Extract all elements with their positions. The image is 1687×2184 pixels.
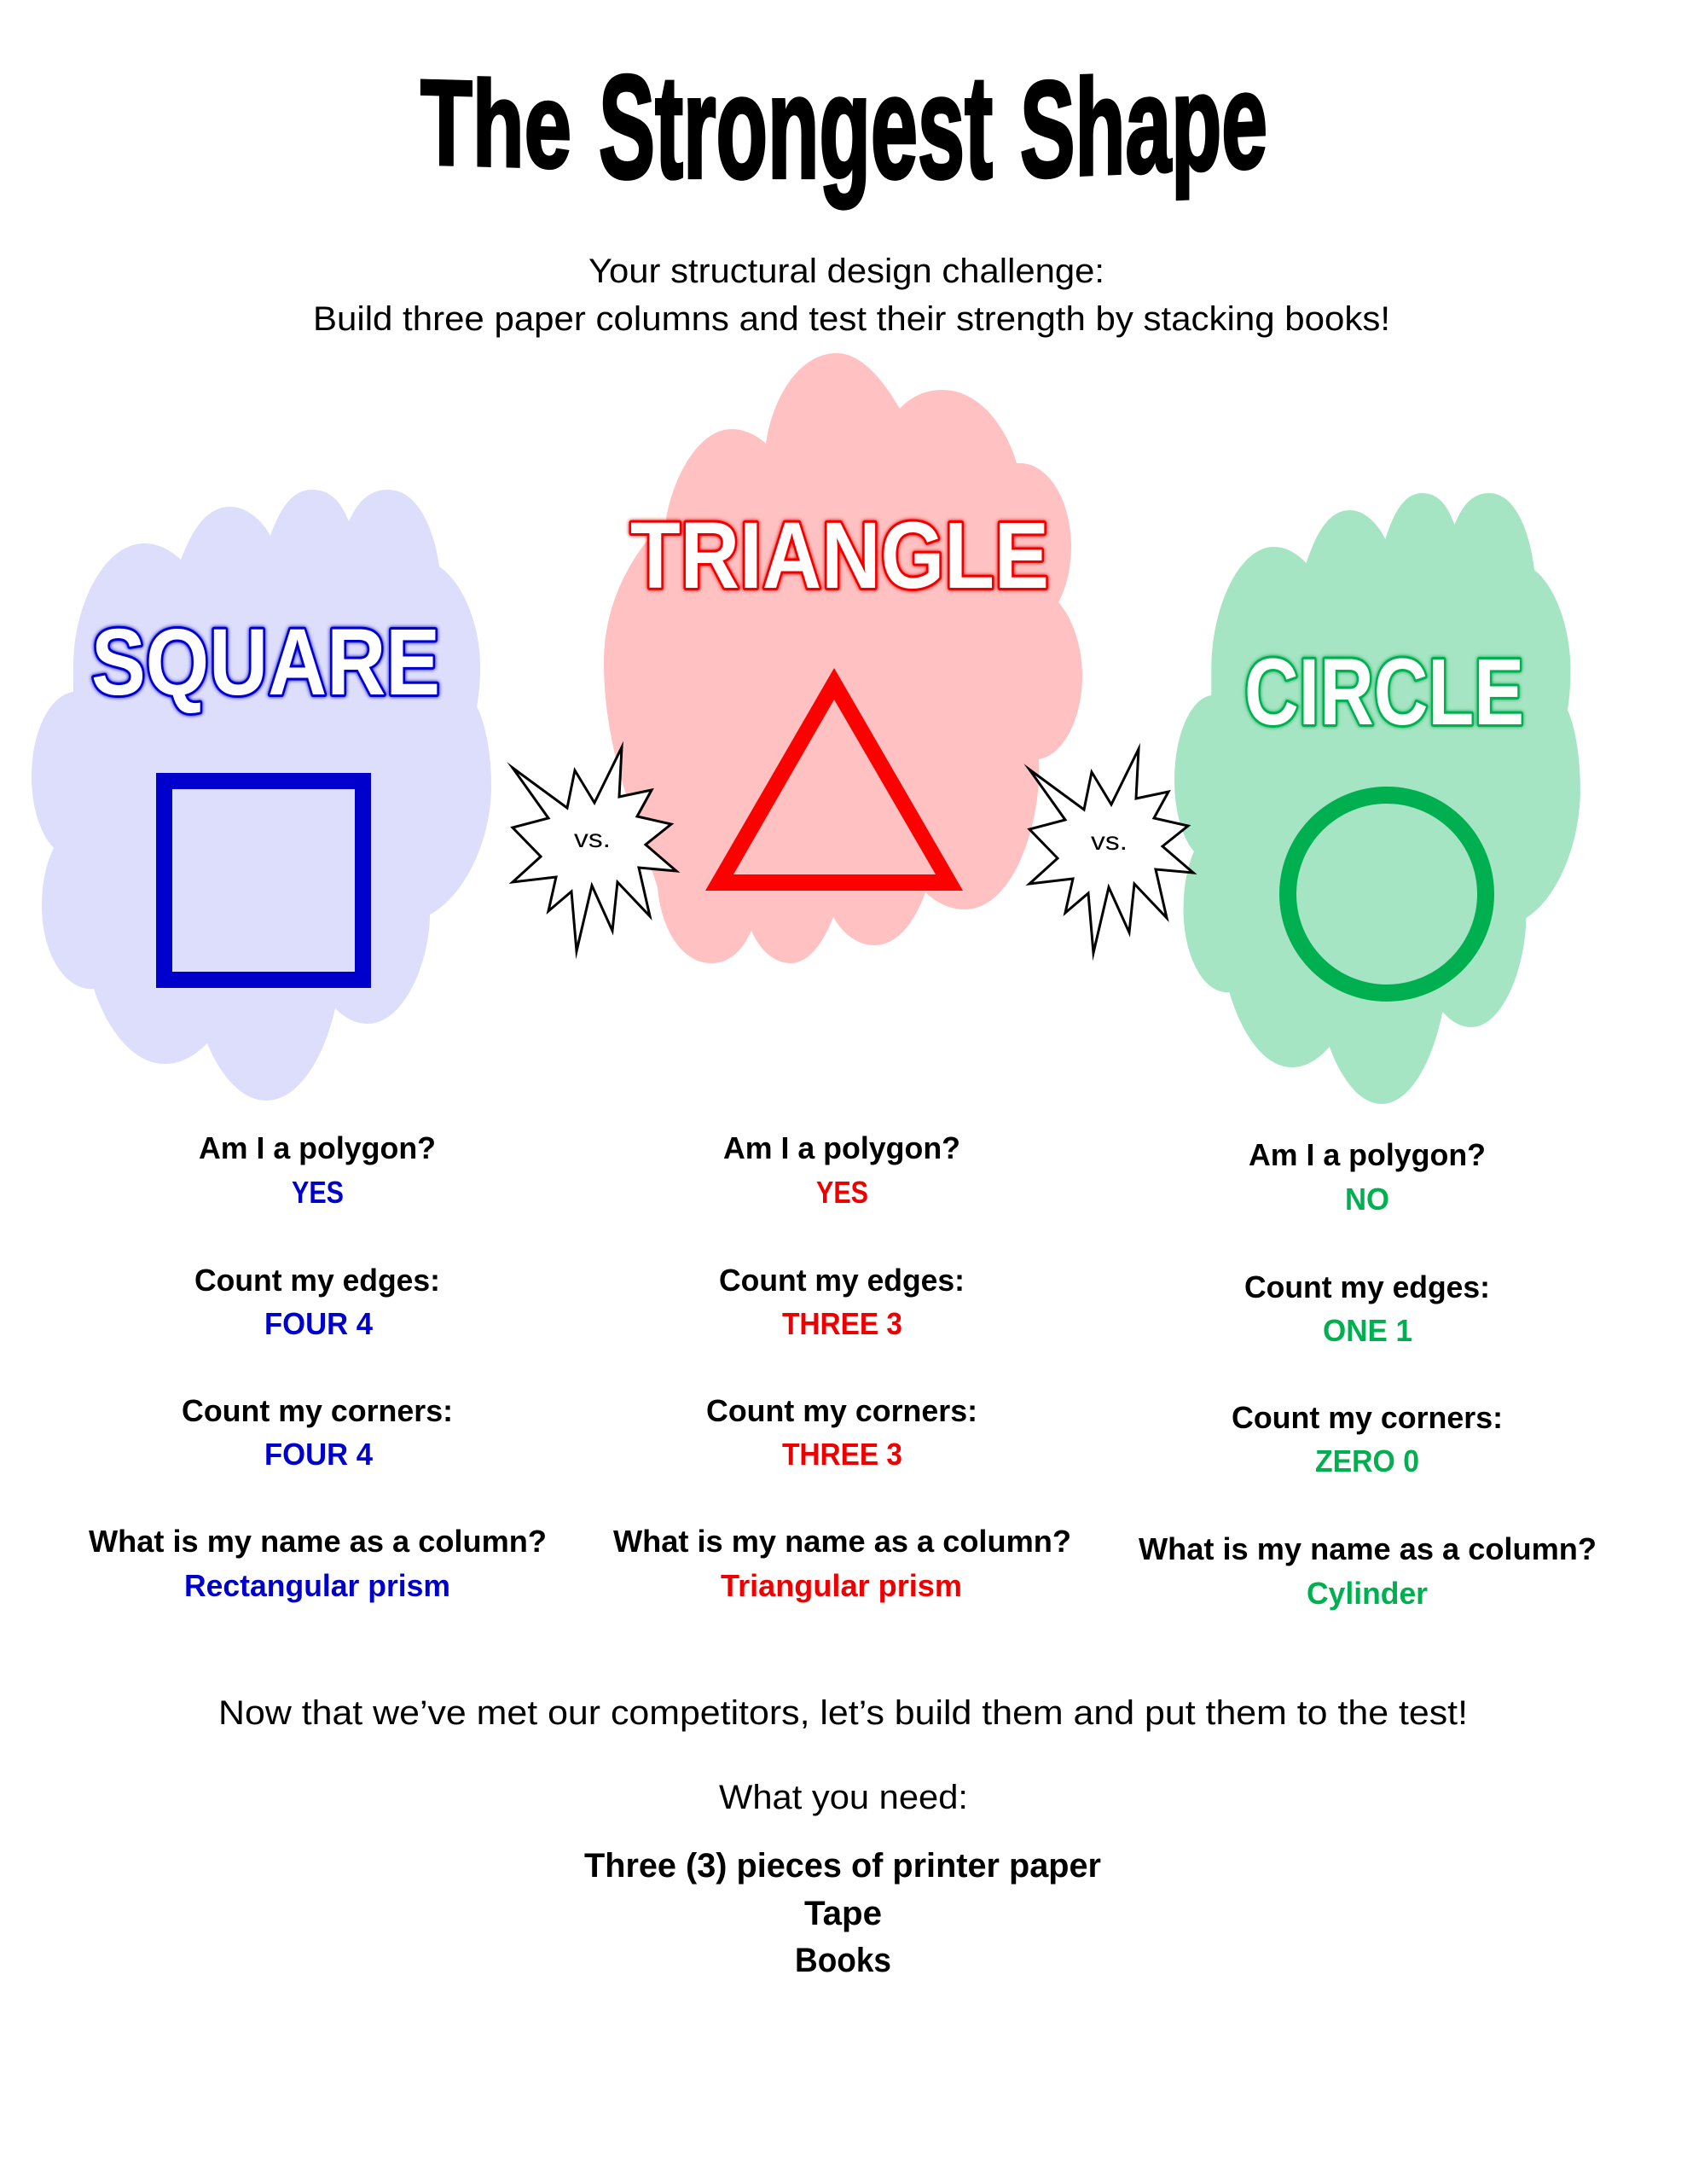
facts: square: Rectangular prism: [184, 1568, 450, 1603]
circle cloud: [1174, 493, 1580, 1104]
panel: triangle: [604, 353, 1082, 963]
icon: circle: [1288, 795, 1486, 993]
facts: circle: [1139, 1137, 1597, 1611]
facts: circle: Am I a polygon?: [1249, 1137, 1486, 1172]
icon: square: [164, 781, 363, 979]
starburst: vs. left: vs.: [574, 825, 611, 853]
panel: square: [32, 490, 491, 1101]
title: [420, 44, 1267, 209]
facts: square: FOUR 4: [264, 1306, 373, 1341]
facts: triangle: Count my corners:: [706, 1393, 977, 1428]
materials list: [584, 1847, 1101, 1979]
facts: square: YES: [292, 1175, 344, 1210]
facts: triangle: YES: [816, 1175, 868, 1210]
facts: circle: Count my corners:: [1232, 1400, 1503, 1435]
materials list: Books: [795, 1942, 891, 1979]
facts: square: [89, 1130, 547, 1603]
starburst: vs. right: [1029, 749, 1193, 953]
facts: square: What is my name as a column?: [89, 1524, 547, 1559]
facts: square: Am I a polygon?: [199, 1130, 436, 1165]
icon: triangle: [705, 668, 963, 891]
square cloud: [32, 490, 491, 1101]
facts: triangle: Count my edges:: [719, 1263, 965, 1298]
facts: circle: What is my name as a column?: [1139, 1531, 1597, 1566]
title: Strongest: [599, 45, 993, 209]
facts: circle: NO: [1345, 1182, 1389, 1217]
facts: triangle: THREE 3: [782, 1437, 902, 1472]
facts: circle: ONE 1: [1323, 1313, 1412, 1348]
materials list: Three (3) pieces of printer paper: [584, 1847, 1101, 1885]
facts: circle: Count my edges:: [1244, 1269, 1490, 1304]
facts: square: FOUR 4: [264, 1437, 373, 1472]
triangle heading: TRIANGLE: [630, 503, 1049, 608]
facts: triangle: [613, 1130, 1071, 1603]
facts: square: Count my edges:: [194, 1263, 440, 1298]
materials list: Tape: [804, 1895, 882, 1932]
facts: triangle: Triangular prism: [721, 1568, 962, 1603]
intro text: [313, 253, 1390, 338]
facts: circle: ZERO 0: [1315, 1443, 1419, 1478]
intro text: Your structural design challenge:: [588, 253, 1104, 290]
square heading: SQUARE: [91, 610, 440, 715]
intro text: Build three paper columns and test their strength by stacking books!: [313, 300, 1390, 338]
starburst: vs. right: vs.: [1091, 828, 1128, 856]
title: Shape: [1020, 44, 1267, 207]
triangle cloud: [604, 353, 1082, 963]
facts: triangle: THREE 3: [782, 1306, 902, 1341]
closing text: Now that we’ve met our competitors, let’s build them and put them to the test!: [218, 1694, 1468, 1732]
materials heading: What you need:: [719, 1779, 968, 1816]
facts: square: Count my corners:: [182, 1393, 453, 1428]
facts: triangle: Am I a polygon?: [723, 1130, 960, 1165]
facts: triangle: What is my name as a column?: [613, 1524, 1071, 1559]
title: The: [420, 55, 571, 195]
circle heading: CIRCLE: [1244, 640, 1524, 745]
facts: circle: Cylinder: [1307, 1576, 1428, 1611]
starburst: vs. left: [513, 747, 676, 951]
panel: circle: [1174, 493, 1580, 1104]
